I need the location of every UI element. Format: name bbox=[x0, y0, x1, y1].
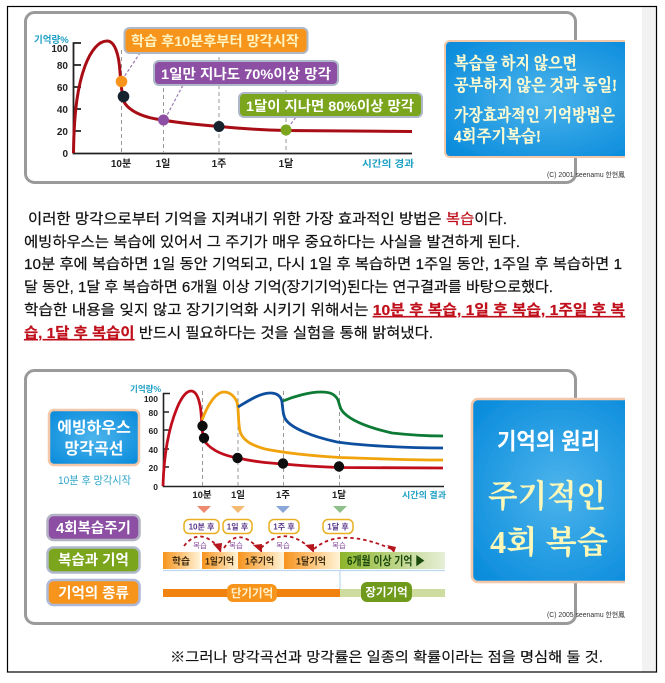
y axis labels: 60 bbox=[149, 426, 158, 436]
y axis labels: 기억량% bbox=[34, 34, 69, 46]
text block: explanation: 10분 후에 복습하면 1일 동안 기억되고, 다시 1일 후 복습하면 1주일 동안, 1주일 후 복습하면 1 bbox=[24, 256, 622, 273]
curve: third review bbox=[238, 393, 443, 448]
y axis labels: 100 bbox=[144, 394, 158, 404]
x axis labels bbox=[111, 157, 414, 170]
y axis labels: 0 bbox=[153, 482, 158, 492]
y axis labels bbox=[130, 384, 161, 492]
callout box: review message: 복습을 하지 않으면 bbox=[454, 53, 577, 73]
callout: orange: 학습 후10분후부터 망각시작 bbox=[131, 33, 299, 49]
panel: top forgetting curve bbox=[26, 12, 625, 182]
y axis labels: 0 bbox=[62, 149, 68, 160]
long-term pill bbox=[361, 582, 412, 602]
timeline markers bbox=[197, 506, 347, 513]
callout box: review message: 공부하지 않은 것과 동일! bbox=[454, 75, 617, 95]
callout box: principle of memory: 4회 복습 bbox=[490, 524, 608, 560]
memory duration bar: 1달기억 bbox=[296, 556, 326, 568]
y axis labels: 40 bbox=[149, 445, 158, 455]
callout: purple bbox=[154, 61, 338, 85]
callout: purple: 1일만 지나도 70%이상 망각 bbox=[161, 66, 331, 82]
review small labels: 복습 bbox=[276, 541, 290, 550]
callout box: review message bbox=[445, 41, 645, 157]
label: memory types: 기억의 종류 bbox=[58, 585, 129, 602]
bar separators bbox=[163, 570, 445, 589]
y axis labels: 기억량% bbox=[130, 384, 161, 394]
text block: explanation: 학습한 내용을 잊지 않고 장기기억화 시키기 위해서는 10분 후 복습, 1일 후 복습, 1주일 후 복 bbox=[24, 302, 625, 319]
long-term pill: 장기기억 bbox=[365, 585, 408, 599]
short-term pill bbox=[227, 584, 277, 602]
x axis labels: 10분 bbox=[192, 490, 212, 501]
tile caption: 10분 후 망각시작 bbox=[58, 474, 131, 487]
dashed guides bbox=[122, 50, 286, 153]
text block: explanation: 습, 1달 후 복습이 반드시 필요하다는 것을 실험을 통해 밝혀냈다. bbox=[24, 325, 433, 342]
callout box: principle of memory: 주기적인 bbox=[488, 478, 606, 514]
x axis labels: 1주 bbox=[212, 158, 226, 170]
x axis labels: 10분 bbox=[111, 158, 131, 170]
short-term pill: 단기기억 bbox=[231, 586, 273, 600]
copyright: (C) 2001 seenamu 한현鳳 bbox=[547, 171, 625, 179]
y axis labels bbox=[34, 34, 69, 160]
review time pills bbox=[184, 520, 353, 534]
review time pills: 1주 후 bbox=[273, 522, 295, 532]
curve dots bbox=[197, 421, 344, 472]
dashed guides bbox=[202, 391, 340, 486]
text block: explanation bbox=[24, 211, 625, 342]
footnote: ※그러나 망각곡선과 망각률은 일종의 확률이라는 점을 명심해 둘 것. bbox=[170, 649, 603, 665]
callout leaders bbox=[122, 53, 296, 128]
copyright: (C) 2005 seenamu 한현鳳 bbox=[547, 611, 625, 619]
y axis labels: 100 bbox=[51, 44, 68, 55]
label: review and memory: 복습과 기억 bbox=[58, 552, 129, 569]
memory duration bar: 6개월 이상 기억 ▶ bbox=[347, 553, 425, 568]
y axis labels: 20 bbox=[57, 127, 68, 138]
callout box: review message: 가장효과적인 기억방법은 bbox=[454, 105, 615, 125]
review small labels: 복습 bbox=[193, 541, 207, 550]
chart axes bbox=[73, 43, 412, 154]
label: four review cycles bbox=[48, 515, 140, 540]
y axis labels: 20 bbox=[149, 463, 158, 473]
x axis labels: 1달 bbox=[332, 489, 346, 501]
text block: explanation: 달 동안, 1달 후 복습하면 6개월 이상 기억(장기기억)된다는 연구결과를 바탕으로했다. bbox=[24, 279, 553, 296]
review small labels: 복습 bbox=[229, 541, 243, 550]
x axis labels bbox=[192, 489, 446, 501]
curve dots bbox=[116, 76, 292, 136]
x axis labels: 1일 bbox=[156, 157, 170, 170]
tile: Ebbinghaus curve: 망각곡선 bbox=[65, 440, 123, 458]
curve: fourth review bbox=[283, 392, 443, 436]
y axis labels: 80 bbox=[57, 61, 68, 72]
text block: explanation: 에빙하우스는 복습에 있어서 그 주기가 매우 중요하다는 사실을 발견하게 된다. bbox=[24, 234, 520, 251]
curve: first memory bbox=[163, 391, 443, 486]
label: memory types bbox=[48, 580, 140, 605]
x axis labels: 1일 bbox=[231, 489, 245, 501]
chart axes bbox=[163, 394, 444, 486]
callout: green: 1달이 지나면 80%이상 망각 bbox=[246, 98, 414, 114]
label: four review cycles: 4회복습주기 bbox=[56, 520, 131, 537]
x axis labels: 1달 bbox=[279, 158, 293, 170]
callout: green bbox=[239, 93, 422, 117]
callout box: principle of memory bbox=[470, 398, 625, 584]
text block: explanation: 이러한 망각으로부터 기억을 지켜내기 위한 가장 효과적인 방법은 복습이다. bbox=[28, 211, 507, 228]
review time pills: 10분 후 bbox=[189, 522, 215, 532]
x axis labels: 시간의 경과 bbox=[362, 158, 414, 170]
panel frame bbox=[26, 12, 576, 182]
memory duration bar: 1일기억 bbox=[205, 556, 234, 568]
panel frame bbox=[26, 370, 576, 624]
x axis labels: 1주 bbox=[276, 490, 290, 501]
forgetting curve bbox=[74, 41, 412, 153]
y axis labels: 60 bbox=[57, 83, 68, 94]
memory duration bar: 학습 bbox=[172, 556, 190, 568]
label: review and memory bbox=[48, 548, 140, 572]
review time pills: 1일 후 bbox=[227, 522, 249, 532]
x axis labels: 시간의 결과 bbox=[402, 490, 446, 500]
memory duration bar: 1주기억 bbox=[245, 556, 274, 568]
callout box: review message: 4회주기복습! bbox=[454, 126, 541, 146]
review time pills: 1달 후 bbox=[327, 522, 349, 532]
tile: Ebbinghaus curve: 에빙하우스 bbox=[57, 419, 131, 437]
review small labels bbox=[193, 541, 346, 550]
review small labels: 복습 bbox=[332, 541, 346, 550]
memory duration bar bbox=[163, 552, 445, 569]
y axis labels: 80 bbox=[149, 408, 158, 418]
tile: Ebbinghaus curve bbox=[49, 410, 139, 465]
memory type bar bbox=[163, 582, 445, 602]
y axis labels: 40 bbox=[57, 105, 68, 116]
curve: second review bbox=[202, 392, 443, 460]
panel: four review cycles bbox=[26, 370, 625, 624]
callout box: principle of memory: 기억의 원리 bbox=[497, 428, 600, 454]
review arrows bbox=[184, 536, 396, 553]
callout: orange bbox=[124, 28, 308, 53]
